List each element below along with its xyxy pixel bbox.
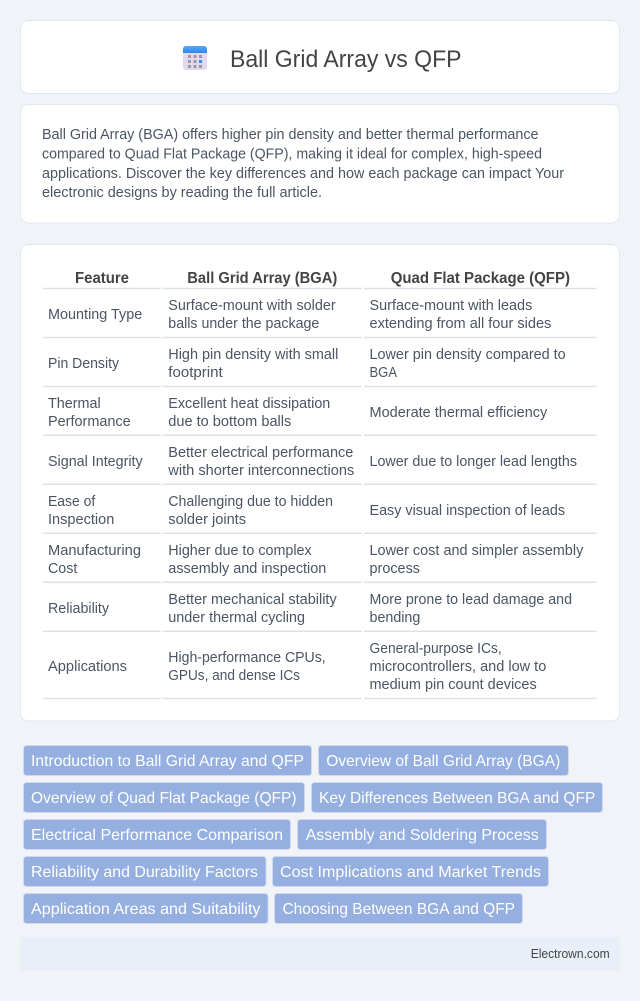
row: ease of inspection: Easy visual inspection of leads	[370, 503, 565, 519]
tag: cost	[272, 856, 548, 886]
tag: assembly	[298, 820, 546, 850]
intro text: Ball Grid Array (BGA) offers higher pin density and better thermal performance	[42, 127, 538, 143]
row: ease of inspection	[48, 494, 565, 528]
row: manufacturing cost: process	[370, 561, 420, 577]
row: ease of inspection: Ease of	[48, 494, 96, 510]
row: signal integrity: Lower due to longer lead lengths	[370, 454, 577, 470]
tag: electrical performance	[24, 820, 290, 850]
row: pin density: footprint	[168, 365, 223, 381]
tag: application areas: Application Areas and Suitability	[31, 901, 260, 918]
tag: choosing	[274, 894, 522, 924]
row: applications	[48, 641, 546, 693]
topic tags	[24, 746, 602, 924]
row: thermal performance	[48, 396, 548, 430]
row: reliability: under thermal cycling	[168, 610, 305, 626]
row: mounting type: balls under the package	[168, 316, 319, 332]
row: manufacturing cost: Manufacturing	[48, 543, 141, 559]
row: applications: GPUs, and dense ICs	[168, 668, 300, 684]
tag: key differences	[312, 782, 602, 812]
row: thermal performance: Thermal	[48, 396, 101, 412]
intro text: electronic designs by reading the full article.	[42, 185, 322, 201]
row: applications: High-performance CPUs,	[168, 650, 326, 666]
row: thermal performance: Moderate thermal efficiency	[370, 405, 548, 421]
row: pin density: BGA	[370, 365, 397, 381]
tag: electrical performance: Electrical Performance Comparison	[31, 827, 283, 844]
tag: overview QFP: Overview of Quad Flat Package (QFP)	[31, 790, 296, 807]
row: reliability: Reliability	[48, 601, 110, 617]
intro text: applications. Discover the key differences and how each package can impact Your	[42, 166, 564, 182]
row: mounting type: Surface-mount with leads	[370, 298, 532, 314]
table header row: Quad Flat Package (QFP)	[391, 270, 570, 287]
tag: overview BGA: Overview of Ball Grid Array (BGA)	[326, 753, 560, 770]
row: applications: Applications	[48, 659, 127, 675]
table header row: Ball Grid Array (BGA)	[187, 270, 337, 287]
row: mounting type: Mounting Type	[48, 307, 142, 323]
row: pin density	[48, 347, 566, 381]
tag: choosing: Choosing Between BGA and QFP	[282, 901, 515, 918]
row: ease of inspection: Challenging due to hidden	[168, 494, 333, 510]
table header row	[75, 270, 570, 287]
row: pin density: High pin density with small	[168, 347, 338, 363]
title: Ball Grid Array vs QFP	[230, 46, 462, 73]
row: mounting type: Surface-mount with solder	[168, 298, 336, 314]
row: applications: medium pin count devices	[370, 677, 537, 693]
row: reliability: More prone to lead damage and	[370, 592, 572, 608]
row: applications: General-purpose ICs,	[370, 641, 502, 657]
header panel	[20, 20, 620, 94]
row: ease of inspection: solder joints	[168, 512, 246, 528]
row: ease of inspection: Inspection	[48, 512, 114, 528]
footer bar	[20, 937, 620, 971]
row: thermal performance: due to bottom balls	[168, 414, 291, 430]
row: mounting type	[48, 298, 551, 332]
tag: cost: Cost Implications and Market Trends	[280, 864, 541, 881]
tag: overview BGA	[318, 746, 568, 776]
intro text: compared to Quad Flat Package (QFP), making it ideal for complex, high-speed	[42, 146, 542, 162]
table header row: Feature	[75, 270, 129, 287]
row: applications: microcontrollers, and low to	[370, 659, 546, 675]
tag: introduction	[24, 746, 312, 776]
tag: key differences: Key Differences Between BGA and QFP	[319, 790, 595, 807]
tag: assembly: Assembly and Soldering Process	[306, 827, 539, 844]
row: signal integrity: Signal Integrity	[48, 454, 143, 470]
row: pin density: Pin Density	[48, 356, 120, 372]
row: manufacturing cost: Lower cost and simpler assembly	[370, 543, 584, 559]
comparison table panel	[20, 244, 620, 721]
tag: introduction: Introduction to Ball Grid Array and QFP	[31, 753, 304, 770]
row: thermal performance: Excellent heat dissipation	[168, 396, 330, 412]
row: mounting type: extending from all four sides	[370, 316, 551, 332]
intro text	[42, 127, 564, 201]
tag: reliability	[24, 856, 266, 886]
row: signal integrity	[48, 445, 577, 479]
row: thermal performance: Performance	[48, 414, 131, 430]
footer credit: Electrown.com	[531, 947, 610, 961]
tag: application areas	[24, 894, 268, 924]
tag: reliability: Reliability and Durability Factors	[31, 864, 258, 881]
row: manufacturing cost	[48, 543, 584, 577]
row: pin density: Lower pin density compared to	[370, 347, 566, 363]
icon: calendar grid chip	[183, 46, 207, 70]
row: reliability: bending	[370, 610, 420, 626]
row: manufacturing cost: Higher due to complex	[168, 543, 313, 559]
tag: overview QFP	[24, 782, 304, 812]
row: reliability	[48, 592, 572, 626]
row: signal integrity: with shorter interconnections	[167, 463, 354, 479]
row: reliability: Better mechanical stability	[168, 592, 338, 608]
intro panel	[20, 104, 620, 223]
row: signal integrity: Better electrical performance	[168, 445, 353, 461]
row: manufacturing cost: assembly and inspection	[168, 561, 326, 577]
row: manufacturing cost: Cost	[48, 561, 77, 577]
